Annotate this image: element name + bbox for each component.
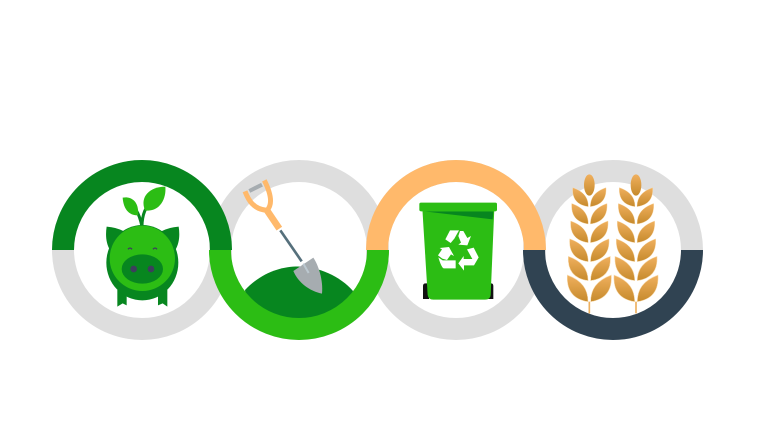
lid shadow (424, 211, 493, 219)
soil mound (245, 266, 353, 320)
ring 1 grey bottom (63, 171, 221, 329)
ring 4 navy arc (534, 250, 692, 329)
ears (106, 227, 179, 250)
nostrils (130, 266, 154, 272)
right wheat (614, 174, 658, 313)
icon: green recycling bin (419, 203, 497, 300)
ring 3 orange arc (377, 171, 535, 250)
ring 1 dark green arc (63, 171, 221, 250)
body (106, 225, 178, 300)
snout (122, 254, 163, 284)
head (110, 226, 175, 291)
handle shank (267, 210, 279, 229)
legs (117, 290, 167, 307)
bin body (422, 208, 494, 300)
ring 3 grey bottom (377, 171, 535, 329)
lid (419, 203, 497, 211)
icon: piggy bank with sprout (106, 187, 179, 307)
blade (293, 258, 322, 294)
eyes (128, 248, 157, 249)
recycle symbol (438, 230, 479, 271)
wheels (423, 283, 493, 299)
handle (245, 180, 270, 210)
icon: two wheat ears (567, 174, 658, 313)
ring 2 bright green arc (220, 250, 378, 329)
ring 2 grey top (220, 171, 378, 329)
icon: shovel (245, 180, 322, 294)
ring 4 grey top (534, 171, 692, 329)
sprout (123, 187, 165, 227)
grip bar (249, 185, 262, 191)
blade highlight (303, 264, 309, 273)
shaft (280, 230, 302, 261)
left wheat (567, 174, 611, 313)
